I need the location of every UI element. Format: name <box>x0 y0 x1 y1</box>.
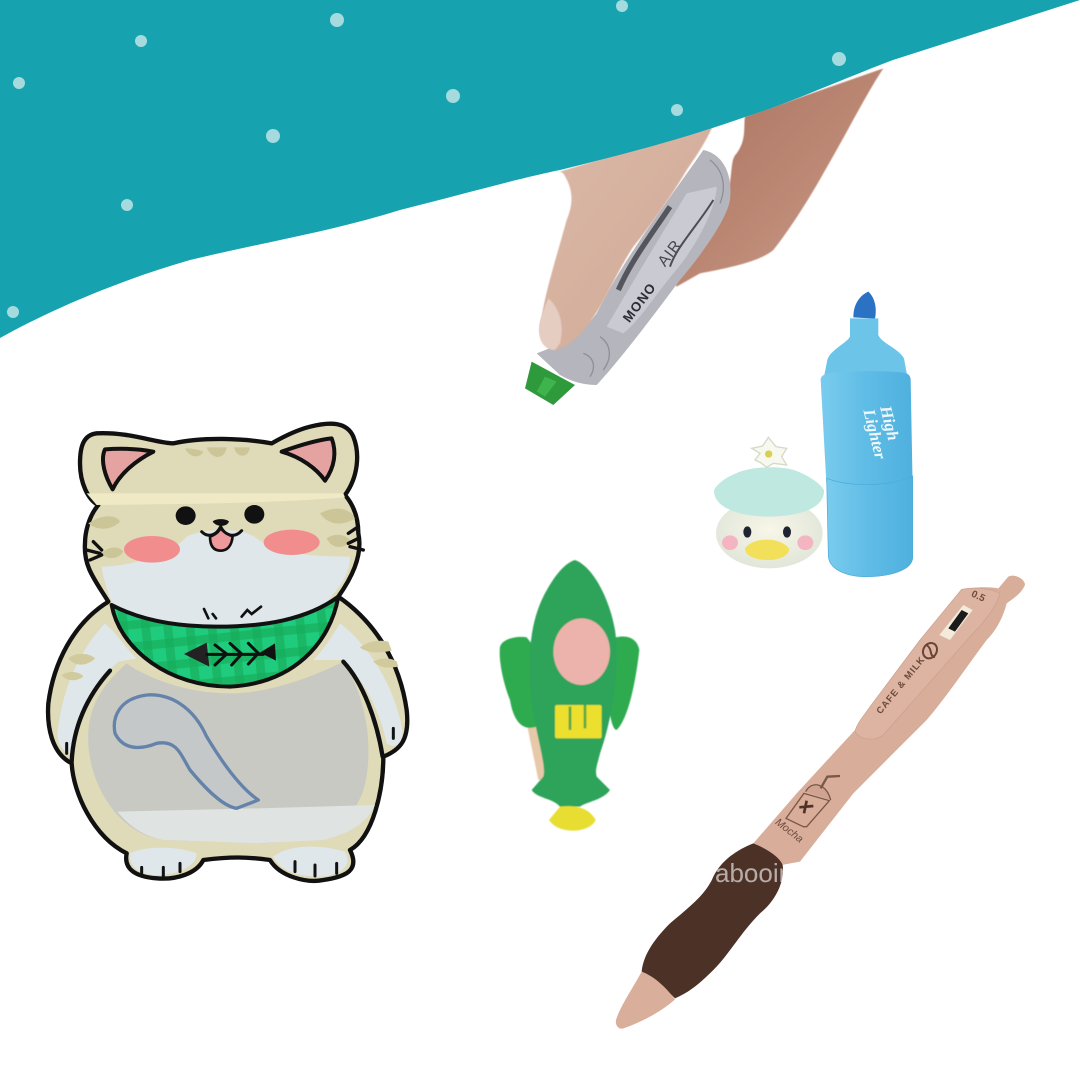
highlighter felt tip <box>853 292 876 319</box>
whiskers fur <box>87 527 363 560</box>
tongue <box>210 528 233 551</box>
highlighter neck and cone <box>824 318 907 377</box>
label: MONO AIR: MONO <box>620 280 659 325</box>
feet <box>130 848 197 875</box>
product: correction tape held in hand <box>525 68 883 405</box>
pen clip <box>855 588 1000 739</box>
hand: thumb <box>660 68 883 287</box>
teal wave banner <box>0 0 1080 338</box>
window glare band <box>117 805 375 843</box>
product: highlighter and duck cap <box>714 292 913 577</box>
zipper highlight <box>87 493 345 505</box>
product: green rocket eraser <box>500 560 639 831</box>
tape dispenser body <box>537 150 731 385</box>
eyes <box>176 506 196 525</box>
clip text: CAFE & MILK <box>874 654 927 716</box>
yellow foot <box>549 806 596 831</box>
clear window <box>88 662 369 843</box>
highlighter label: High <box>876 403 903 442</box>
flower <box>752 437 787 467</box>
banner snow dots <box>7 0 846 318</box>
product: correction tape held in hand: AIR <box>655 237 685 270</box>
arm stripes <box>62 641 398 680</box>
tape dark band <box>618 207 670 290</box>
duck hat <box>714 467 824 517</box>
forehead stripes <box>88 447 355 558</box>
pen tip <box>616 972 675 1029</box>
eraser side shading <box>527 723 548 780</box>
flavour text: Mocha <box>773 816 805 845</box>
coffee bean logo <box>920 640 940 661</box>
white face <box>102 530 350 625</box>
brown rubber grip <box>642 843 783 998</box>
green tape tip <box>525 362 575 405</box>
highlighter lower sleeve <box>827 476 913 577</box>
size label: 0.5 <box>969 589 987 605</box>
toe marks <box>67 728 393 877</box>
nose and mouth <box>213 519 229 526</box>
fish bone <box>184 643 276 667</box>
right wing <box>608 637 639 730</box>
blush cheeks <box>124 536 180 563</box>
yellow panel <box>555 705 602 738</box>
tail outline <box>114 695 258 808</box>
clip window <box>939 605 973 640</box>
pen barrel <box>753 576 1025 865</box>
drink cup icon <box>786 776 840 827</box>
left ear <box>103 449 153 489</box>
rocket body <box>529 560 617 807</box>
duck face <box>716 498 823 568</box>
pink porthole <box>553 618 610 685</box>
chin fur <box>204 607 261 618</box>
watermark text on pen grip: abooin <box>715 858 793 888</box>
hand: index finger <box>539 125 713 350</box>
right ear <box>282 438 334 481</box>
tape light panel <box>607 187 717 333</box>
highlighter label <box>859 403 903 462</box>
arm-to-body lines <box>72 671 110 762</box>
highlighter label: Lighter <box>859 406 890 462</box>
duck beak <box>745 540 789 560</box>
product: cafe and milk gel pen <box>616 576 1025 1029</box>
bandana <box>112 597 338 687</box>
highlighter barrel <box>821 371 913 488</box>
left wing <box>500 637 537 728</box>
duck eyes <box>743 526 751 538</box>
product: cat zip pouch <box>48 424 407 881</box>
pouch silhouette <box>48 424 407 881</box>
arms <box>58 623 137 753</box>
duck cheeks <box>722 535 738 550</box>
fingernail <box>539 298 562 350</box>
